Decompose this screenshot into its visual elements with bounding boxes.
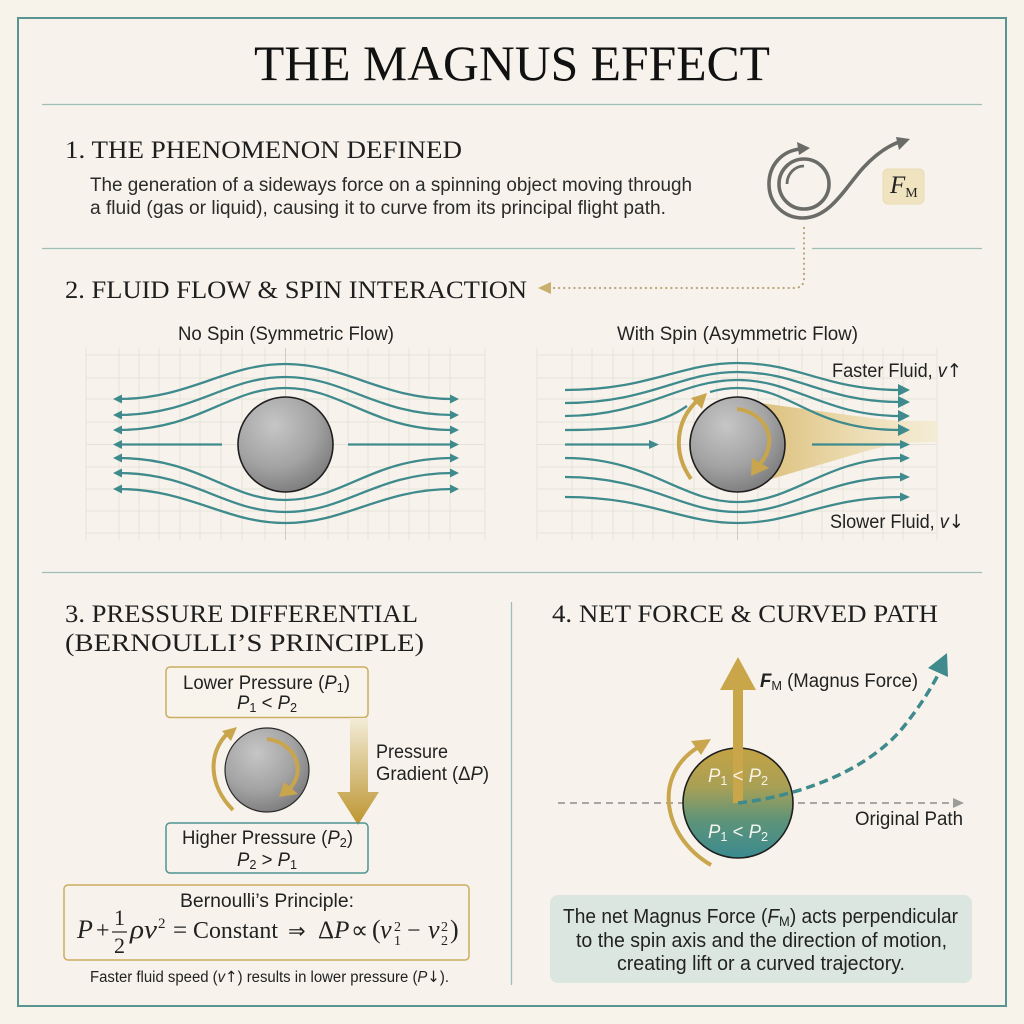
label: magnus force: M	[771, 678, 782, 693]
box: bernoulli formula: 2	[441, 934, 448, 949]
box: lower pressure: )	[344, 673, 350, 694]
box: higher pressure: 2	[340, 835, 347, 850]
box: bernoulli formula: 1	[394, 934, 401, 949]
ball pressure labels: P	[708, 766, 721, 787]
streamlines	[113, 364, 459, 523]
panel: phenomenon defined	[65, 137, 924, 219]
spin arrow	[669, 739, 711, 865]
box: bernoulli formula: ⇒	[288, 919, 306, 943]
label: faster fluid: Faster Fluid, v↑	[832, 360, 962, 382]
box: lower pressure: <	[256, 693, 278, 714]
label: pressure gradient	[376, 742, 489, 785]
box: bernoulli formula: ΔP	[318, 917, 349, 944]
box: bernoulli formula: )	[450, 915, 459, 944]
ball pressure labels: P	[708, 822, 721, 843]
label: pressure gradient: Gradient (ΔP)	[376, 764, 489, 785]
callout: ) acts perpendicular	[790, 906, 958, 928]
sphere	[238, 397, 333, 492]
definition text: a fluid (gas or liquid), causing it to curve from its principal flight path.	[90, 198, 666, 219]
box: higher pressure: 1	[290, 857, 297, 872]
definition text	[90, 175, 692, 219]
heading 2: 2. FLUID FLOW & SPIN INTERACTION	[65, 277, 527, 304]
ball pressure labels: P	[749, 822, 761, 843]
chart: with spin flow	[537, 324, 964, 540]
sphere with spin arrows	[214, 727, 309, 812]
box: lower pressure: 1	[249, 700, 256, 715]
sphere	[690, 397, 785, 492]
box: lower pressure: Lower Pressure (P	[183, 673, 337, 694]
heading 1: 1. THE PHENOMENON DEFINED	[65, 137, 462, 164]
ball pressure labels: <	[727, 766, 749, 787]
box: bernoulli formula: (	[372, 915, 381, 944]
box: bernoulli formula: 2	[158, 916, 166, 932]
gold wake	[760, 403, 937, 480]
callout: creating lift or a curved trajectory.	[617, 953, 905, 975]
label: original path: Original Path	[855, 809, 963, 830]
label: with spin: With Spin (Asymmetric Flow)	[617, 324, 858, 345]
box: bernoulli formula: 1	[114, 905, 125, 930]
box: bernoulli formula: +	[96, 918, 110, 944]
box: bernoulli formula: −	[407, 918, 421, 944]
chart: no spin flow	[86, 324, 485, 540]
heading 3	[65, 601, 424, 657]
ball pressure labels: <	[727, 822, 749, 843]
definition text: The generation of a sideways force on a spinning object moving through	[90, 175, 692, 196]
original path line	[558, 798, 964, 808]
ball pressure labels: P	[749, 766, 761, 787]
box: bernoulli formula: ν	[428, 915, 440, 944]
label: magnus force: (Magnus Force)	[782, 671, 918, 692]
box: bernoulli formula: 2	[394, 920, 401, 935]
spin arrows	[679, 393, 769, 479]
caption: faster speed lower pressure: Faster fluid speed (v↑) results in lower pressure (P↓).	[90, 968, 449, 986]
box: bernoulli formula: ∝	[351, 918, 368, 944]
ball pressure labels: 1	[720, 829, 727, 844]
panel: net force and curved path	[550, 601, 972, 983]
icon: force symbol badge: F	[890, 172, 905, 199]
panel: pressure differential	[64, 601, 489, 986]
arrow: magnus force	[720, 657, 756, 803]
box: higher pressure: P	[237, 850, 250, 871]
title: THE MAGNUS EFFECT	[254, 35, 770, 91]
heading 4: 4. NET FORCE & CURVED PATH	[552, 601, 938, 628]
box: bernoulli formula: ρν	[129, 915, 158, 944]
box: higher pressure	[166, 823, 368, 873]
ball pressure labels: 2	[761, 829, 768, 844]
dotted connector arrow	[538, 228, 804, 294]
divider with gap	[42, 248, 982, 250]
box: bernoulli formula: Bernoulli’s Principle:	[180, 891, 354, 912]
box: bernoulli formula: P	[76, 915, 93, 944]
box: higher pressure: >	[256, 850, 278, 871]
icon: force symbol badge	[883, 169, 924, 204]
callout: to the spin axis and the direction of motion,	[576, 930, 947, 952]
box: bernoulli formula: 2	[114, 933, 125, 958]
force ball	[683, 748, 793, 858]
curved dashed trajectory	[738, 653, 948, 803]
arrow: pressure gradient	[337, 718, 379, 825]
ball pressure labels	[708, 766, 768, 844]
box: higher pressure: 2	[249, 857, 256, 872]
ball pressure labels: 2	[761, 773, 768, 788]
box: bernoulli formula: ν	[380, 915, 392, 944]
streamlines	[565, 363, 910, 523]
icon: force symbol badge: M	[905, 186, 918, 201]
box: bernoulli formula: 2	[441, 920, 448, 935]
box: bernoulli formula: =	[173, 917, 187, 944]
box: lower pressure	[166, 667, 368, 718]
icon: spinning ball with curved path	[769, 137, 910, 218]
box: lower pressure: 2	[290, 700, 297, 715]
box: lower pressure: P	[278, 693, 290, 714]
box: lower pressure: 1	[337, 680, 344, 695]
box: bernoulli formula	[64, 885, 469, 960]
box: lower pressure: P	[237, 693, 250, 714]
box: higher pressure: )	[347, 828, 353, 849]
label: pressure gradient: Pressure	[376, 742, 448, 763]
callout	[550, 895, 972, 983]
label: slower fluid: Slower Fluid, v↓	[830, 511, 964, 533]
callout: The net Magnus Force (F	[563, 906, 780, 928]
box: higher pressure: Higher Pressure (P	[182, 828, 340, 849]
label: no spin: No Spin (Symmetric Flow)	[178, 324, 394, 345]
label: magnus force: F	[760, 671, 773, 692]
heading 3: 3. PRESSURE DIFFERENTIAL	[65, 601, 418, 628]
callout: M	[779, 914, 790, 929]
ball pressure labels: 1	[720, 773, 727, 788]
box: bernoulli formula: Constant	[193, 918, 278, 944]
heading 3: (BERNOULLI’S PRINCIPLE)	[65, 630, 424, 657]
box: higher pressure: P	[278, 850, 290, 871]
